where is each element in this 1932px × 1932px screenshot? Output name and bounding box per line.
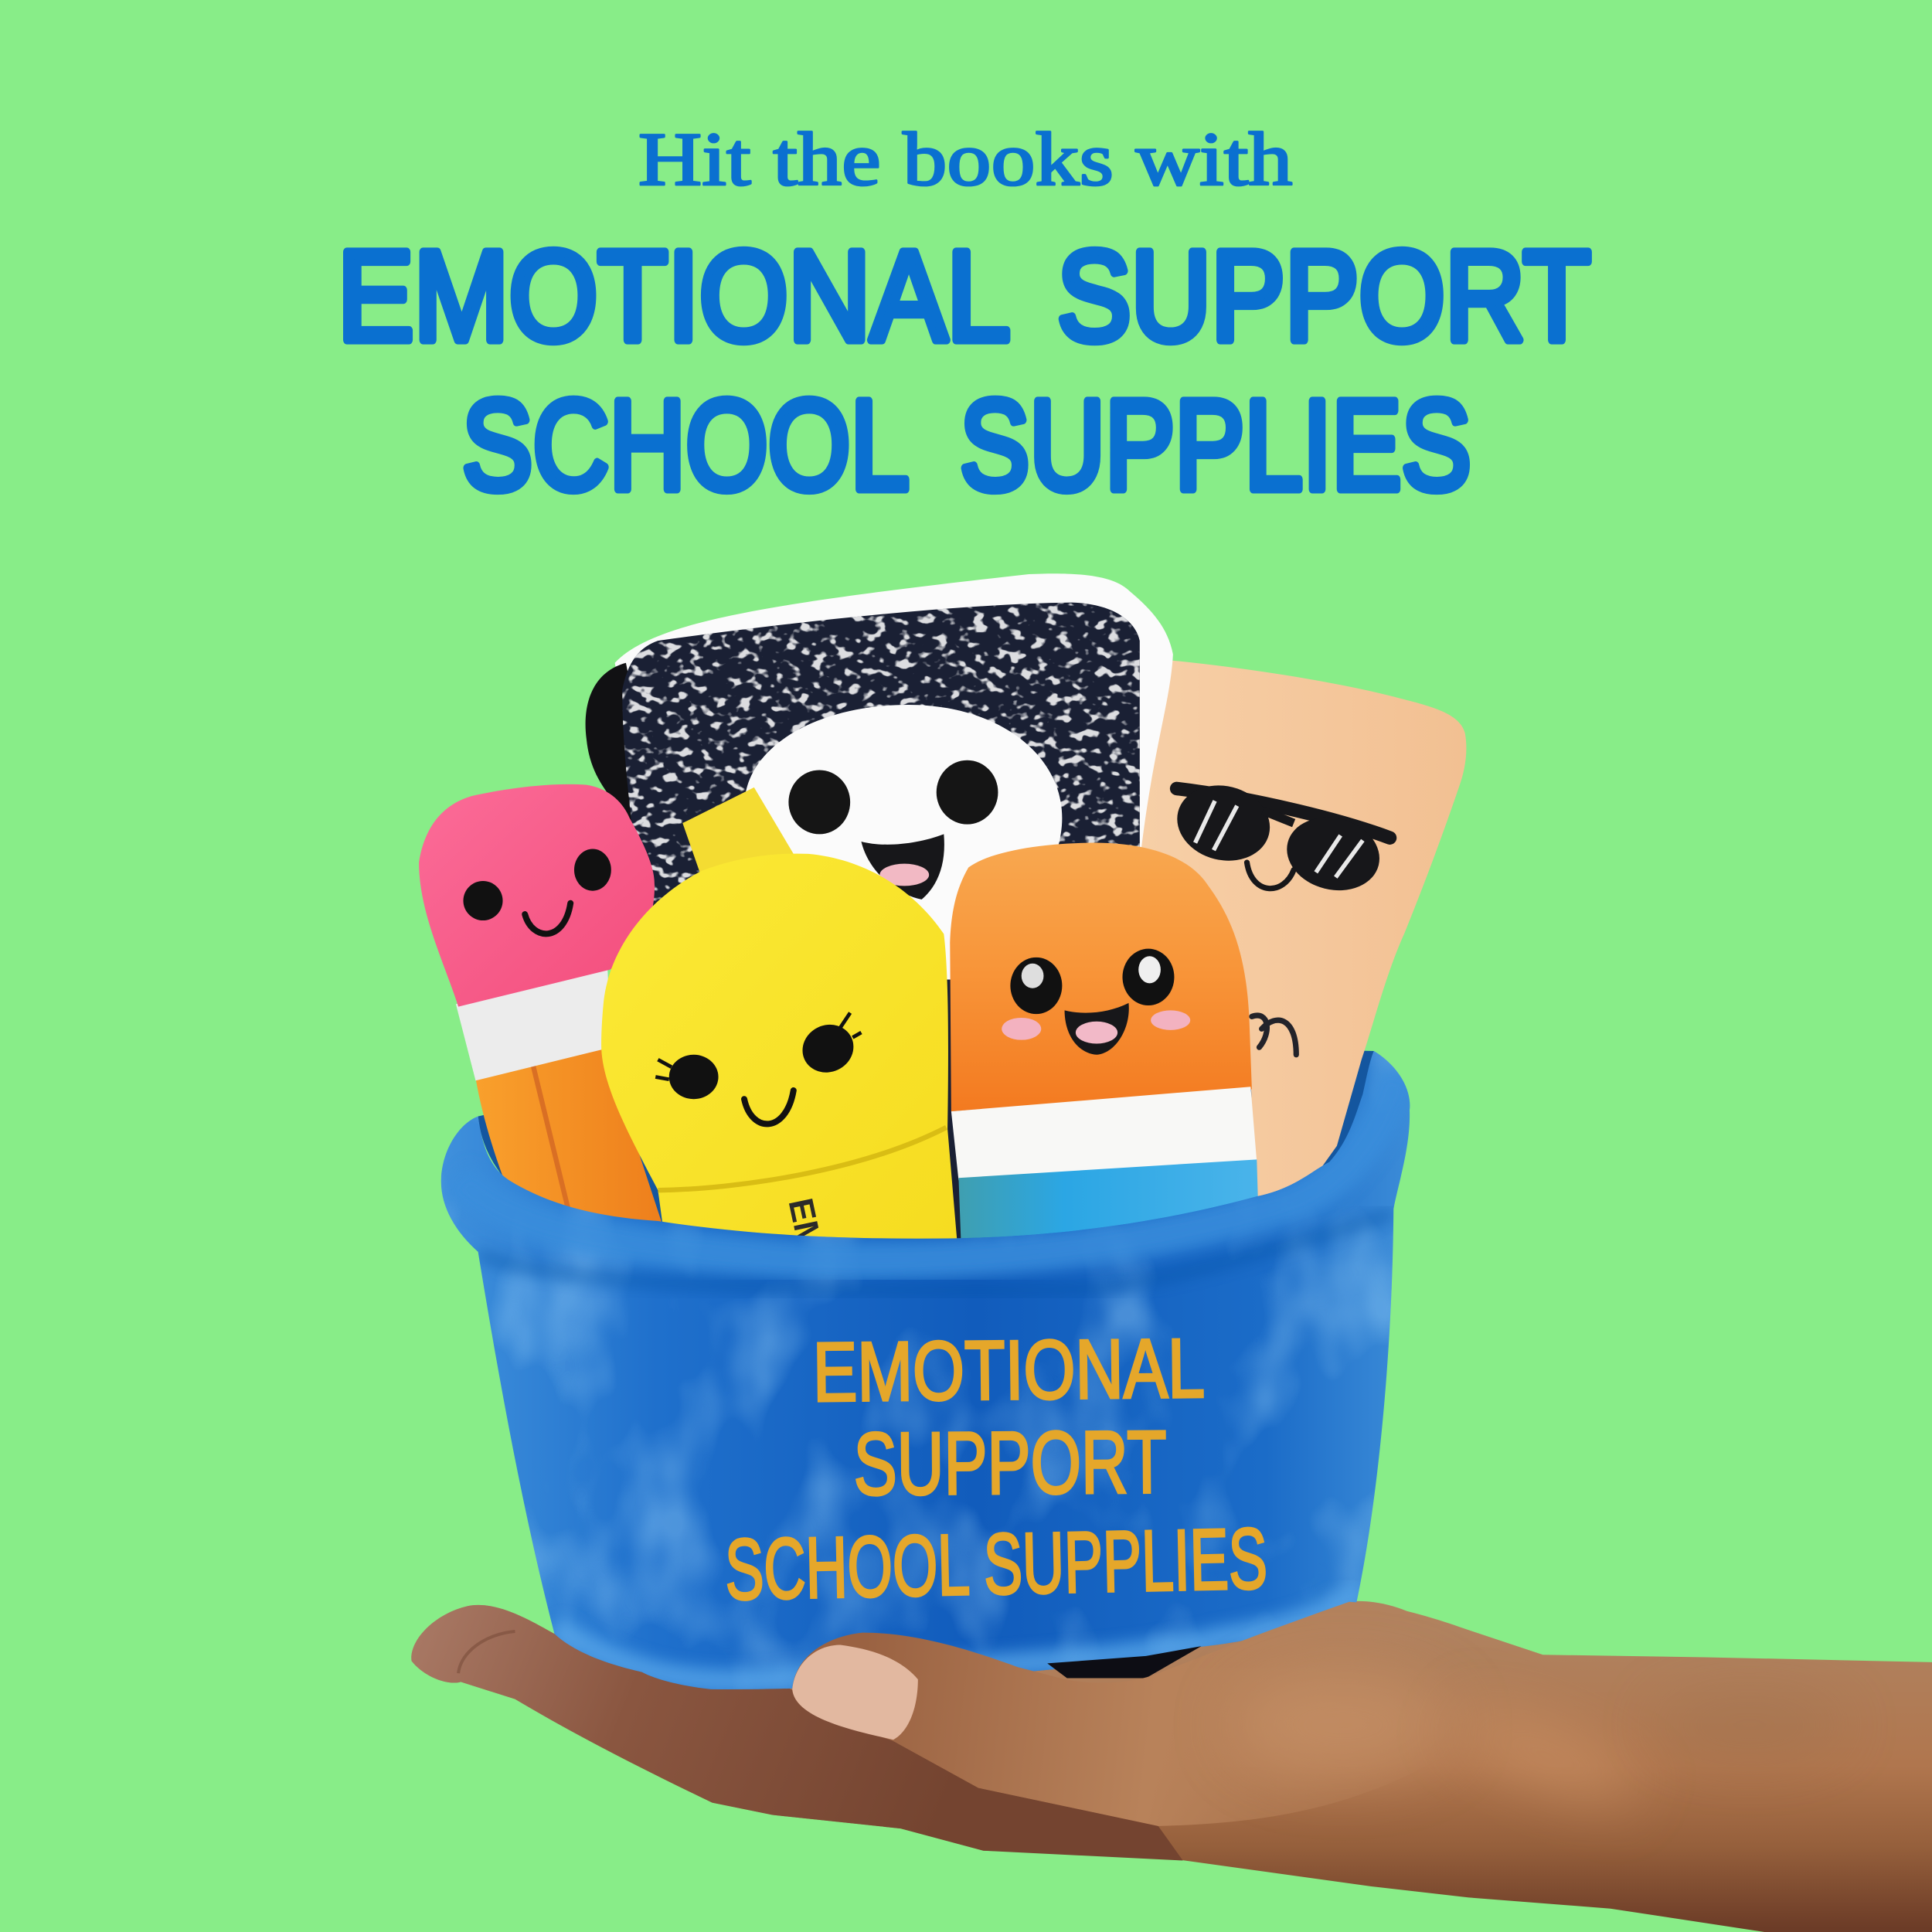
glue mouth [1065,1003,1129,1055]
highlighter body [601,854,957,1244]
pencil orange barrel [475,1046,662,1223]
highlighter seam [658,1128,946,1190]
label line 2: SUPPORT [853,1413,1167,1514]
dark gap under bucket [1047,1646,1202,1679]
highlighter eyes [669,1016,862,1099]
hand and arm [411,1601,1932,1932]
glue cap [950,843,1252,1111]
plush: composition notebook [586,573,1173,1238]
hand front base [1146,1602,1553,1849]
headline line 2: SUPPLIES [960,374,1471,517]
bucket back inside [478,1051,1376,1244]
glue right eye [1122,949,1174,1005]
notebook tongue [879,864,929,886]
glue cheeks [1002,1010,1190,1040]
arm and palm [411,1601,1932,1932]
highlighter brand letters: EM [781,1195,828,1253]
thumb shape [792,1602,1495,1826]
plush: pencil [419,784,662,1223]
infographic canvas [343,131,1932,1932]
headline line 1 [338,225,1590,368]
notebook black spine [586,663,665,862]
bucket body [441,1051,1410,1689]
bucket lower light band [554,1590,1362,1682]
notebook cover [622,603,1140,949]
plush: highlighter [601,787,957,1253]
marble pattern [622,603,1140,901]
headline line 1: EMOTIONAL [338,225,1010,368]
notebook mouth [861,834,944,900]
headline line 1: SUPPORT [1057,225,1590,368]
notebook lower sliver [939,980,966,1238]
highlighter tab [682,787,794,876]
thumb and hand front [792,1601,1618,1826]
bucket rim [456,1072,1399,1260]
finger separation [458,1631,515,1673]
pencil eyes [463,849,611,920]
highlighter lashes [655,1013,861,1080]
ruler smile [1247,862,1294,889]
highlighter smile [744,1090,794,1124]
headline line 2 [462,374,1471,517]
bucket mottling [431,1047,1417,1700]
glue left eye [1010,957,1062,1014]
pencil pink eraser [419,784,655,1007]
glue tongue [1076,1022,1117,1043]
notebook eyes [788,760,998,834]
bucket seam shadow [478,1213,1393,1291]
embroidered label [724,1321,1268,1618]
plush blue bucket [431,1047,1417,1700]
headline line 2: SCHOOL [462,374,910,517]
thumbnail [792,1645,918,1740]
label line 1: EMOTIONAL [812,1321,1206,1419]
fingers [411,1605,1183,1861]
notebook face patch [744,705,1062,986]
glue white band [951,1087,1257,1180]
pencil white ferrule [456,966,611,1080]
plush: glue stick [950,843,1259,1244]
glue blue base [958,1159,1259,1244]
icon: sunglasses [1169,776,1389,900]
title block [338,117,1590,517]
subtitle: Hit the books with [638,117,1293,202]
skin highlights [1260,1679,1618,1807]
notebook white page edge [615,573,1173,862]
plush: ruler [1128,661,1466,1205]
label line 3: SCHOOL SUPPLIES [724,1510,1268,1618]
ruler number mark [1252,1015,1296,1055]
pencil smile [525,903,570,934]
